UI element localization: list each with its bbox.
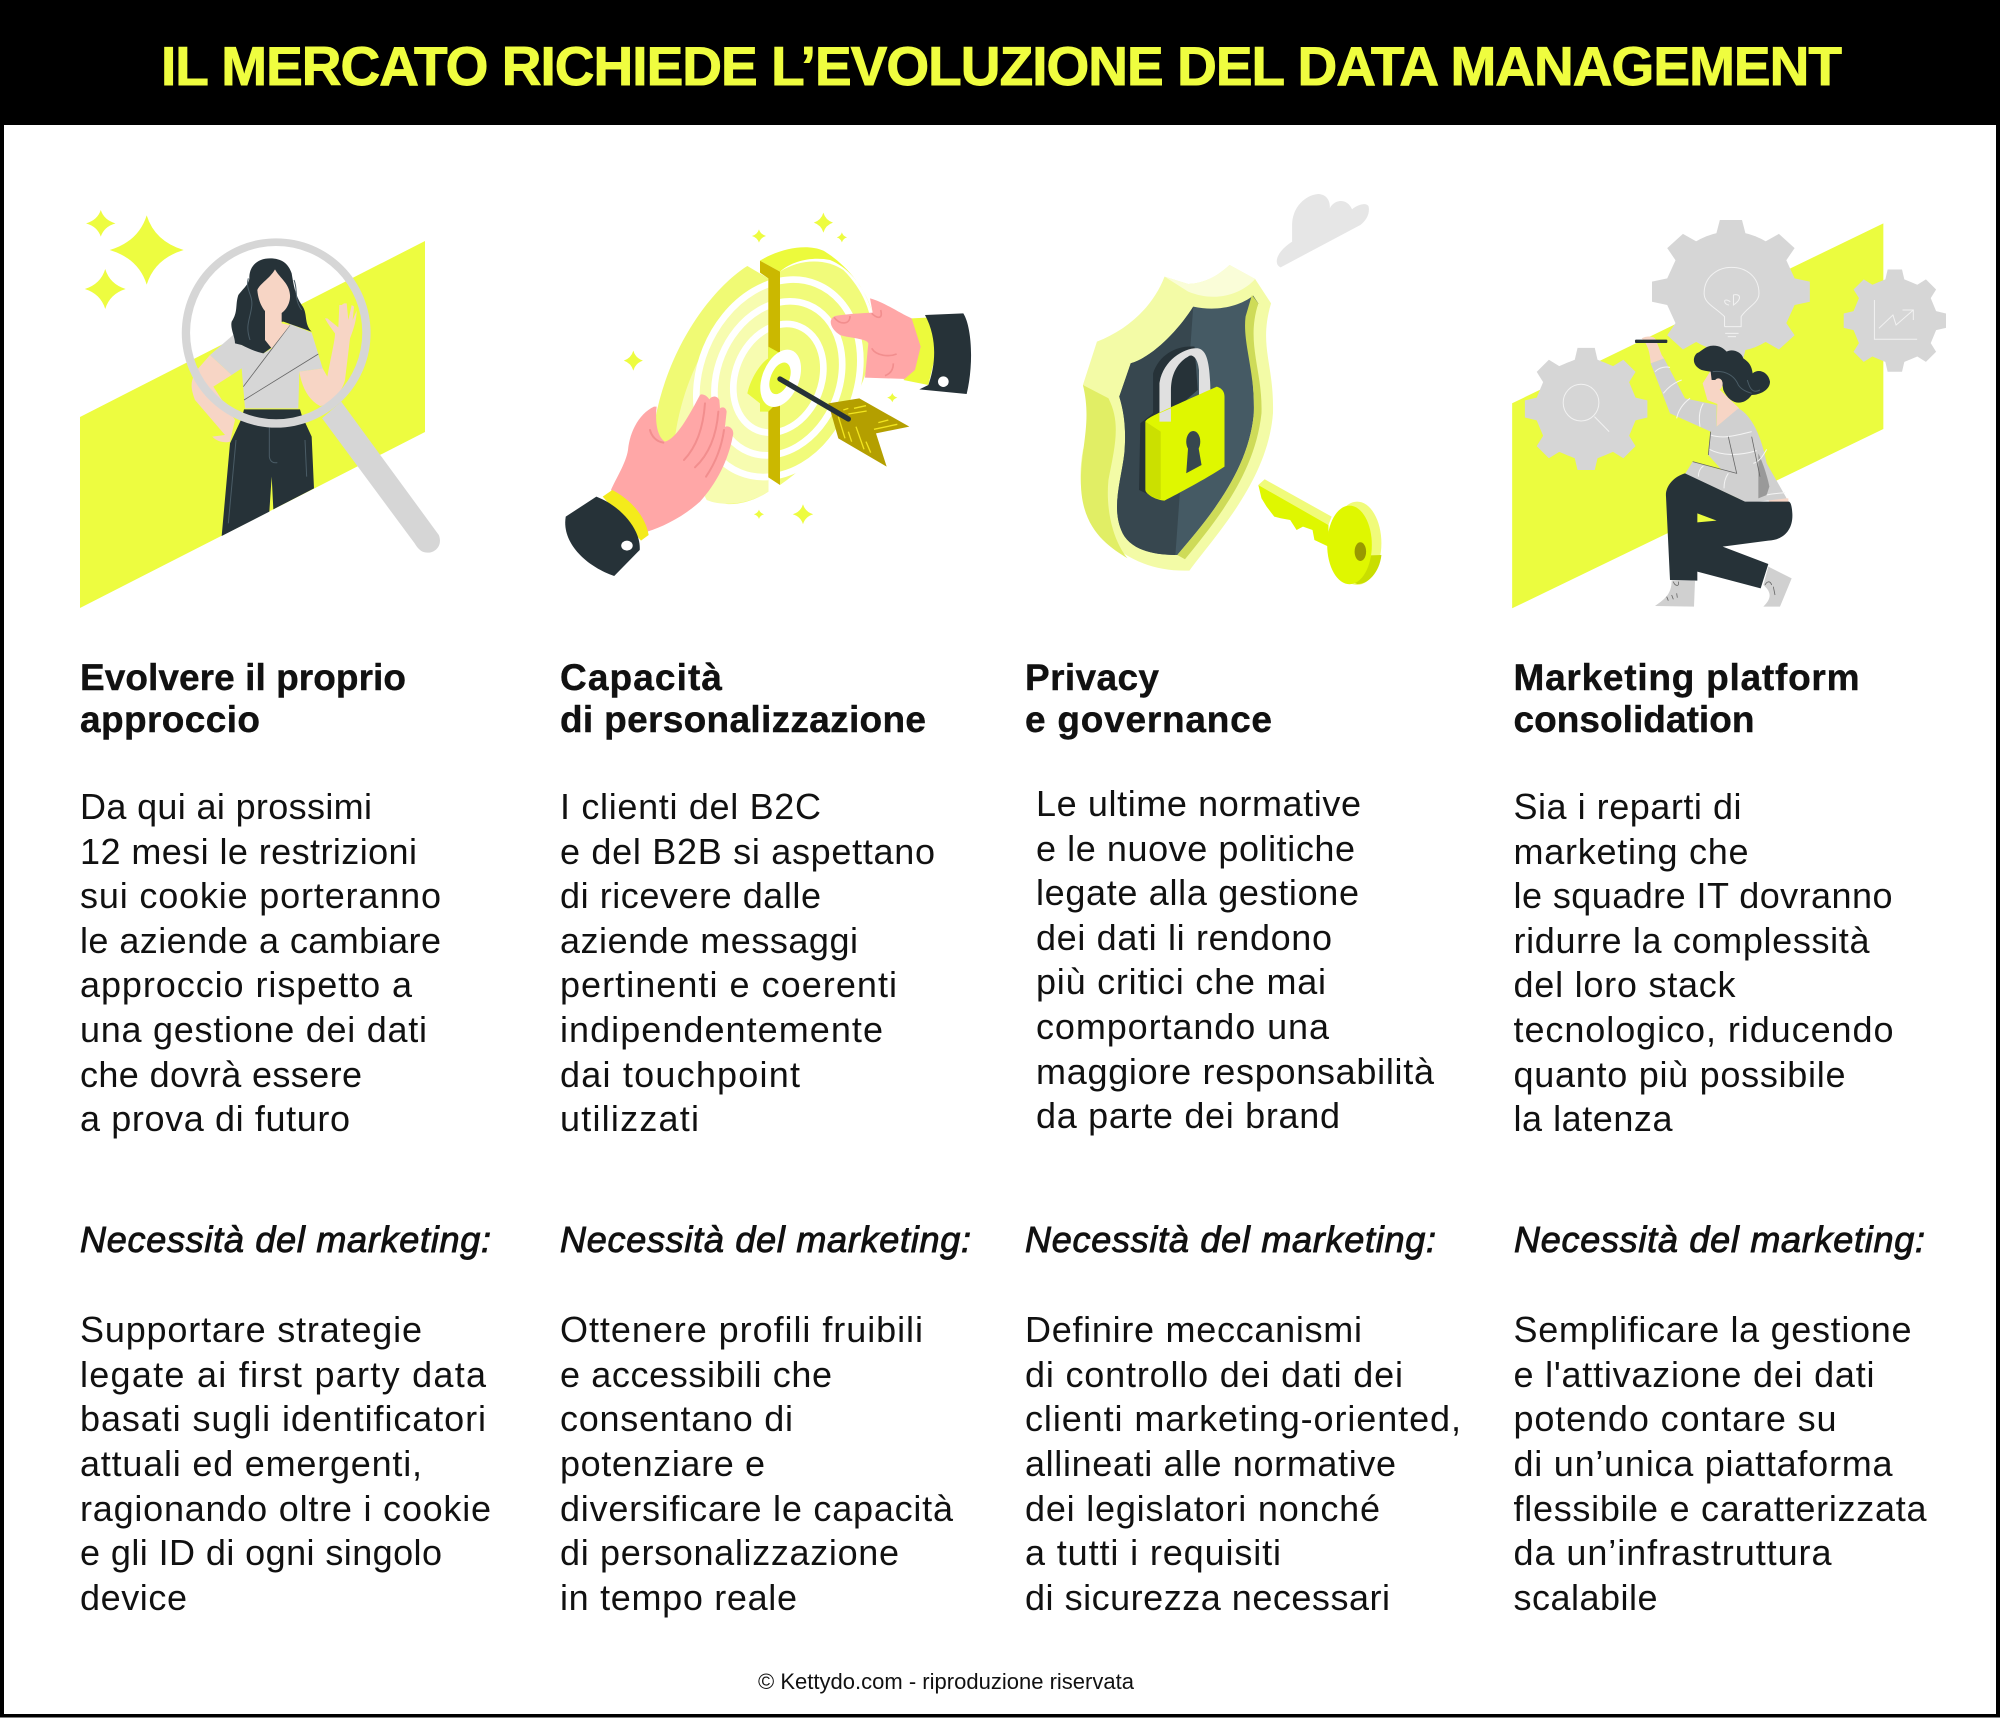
icon: growth chart: [1874, 300, 1917, 339]
body text: tecnologico, riducendo: [1514, 1009, 1894, 1050]
heading: Privacy: [1025, 657, 1159, 698]
body text: aziende messaggi: [560, 920, 858, 961]
heading: [80, 657, 406, 740]
key: [1258, 479, 1381, 585]
illustration: shield, padlock and key: [1081, 194, 1381, 585]
right hand: [831, 298, 971, 394]
body text: le squadre IT dovranno: [1514, 875, 1892, 916]
column 2 text: [560, 657, 971, 1618]
body text: Le ultime normative: [1036, 783, 1361, 824]
heading: approccio: [80, 699, 260, 740]
heading: di personalizzazione: [560, 699, 926, 740]
marketing need text: flessibile e caratterizzata: [1514, 1488, 1927, 1529]
icon: light bulb: [1704, 267, 1759, 337]
icon: magnifier: [1563, 384, 1609, 432]
body text: dei dati li rendono: [1036, 917, 1332, 958]
shirt cuff: [603, 490, 649, 541]
marketing need text: potenziare e: [560, 1443, 765, 1484]
body text: legate alla gestione: [1036, 872, 1359, 913]
body text: pertinenti e coerenti: [560, 964, 897, 1005]
marketing need text: basati sugli identificatori: [80, 1398, 486, 1439]
body text: indipendentemente: [560, 1009, 883, 1050]
marketing need text: da un’infrastruttura: [1514, 1532, 1832, 1573]
bullseye: [747, 344, 809, 413]
woman figure: [192, 258, 357, 536]
marketing need text: di personalizzazione: [560, 1532, 899, 1573]
column 4 text: [1514, 657, 1927, 1618]
marketing need text: ragionando oltre i cookie: [80, 1488, 491, 1529]
marketing need text: di sicurezza necessari: [1025, 1577, 1390, 1618]
body text: quanto più possibile: [1514, 1054, 1846, 1095]
body text: che dovrà essere: [80, 1054, 362, 1095]
marketing need text: e l'attivazione dei dati: [1514, 1354, 1874, 1395]
body text: più critici che mai: [1036, 961, 1326, 1002]
column 3 text: [1025, 657, 1461, 1618]
marketing need text: [1514, 1309, 1927, 1618]
gears: [1525, 220, 1946, 470]
column 1 text: [80, 657, 491, 1618]
subheading: Necessità del marketing:: [80, 1219, 491, 1260]
heading: [1514, 657, 1860, 740]
body text: una gestione dei dati: [80, 1009, 427, 1050]
illustration: target with hands and arrow: [565, 213, 971, 576]
illustration: person with gears: [1512, 220, 1946, 608]
target left half: [656, 266, 768, 504]
body text: di ricevere dalle: [560, 875, 821, 916]
marketing need text: Ottenere profili fruibili: [560, 1309, 923, 1350]
body text: comportando una: [1036, 1006, 1330, 1047]
heading: e governance: [1025, 699, 1272, 740]
title: IL MERCATO RICHIEDE L’EVOLUZIONE DEL DATA MANAGEMENT: [161, 35, 1842, 97]
marketing need text: di un’unica piattaforma: [1514, 1443, 1893, 1484]
target slit: [760, 261, 780, 485]
icon: sparkles: [624, 213, 897, 524]
marketing need text: [1025, 1309, 1461, 1618]
sleeve: [565, 497, 640, 576]
heading: [560, 657, 926, 740]
marketing need text: diversificare le capacità: [560, 1488, 954, 1529]
icon: sparkles: [85, 210, 184, 309]
body text: I clienti del B2C: [560, 786, 821, 827]
marketing need text: consentano di: [560, 1398, 793, 1439]
footer credit: © Kettydo.com - riproduzione riservata: [758, 1669, 1135, 1694]
marketing need text: Semplificare la gestione: [1514, 1309, 1912, 1350]
body text: sui cookie porteranno: [80, 875, 441, 916]
marketing need text: di controllo dei dati dei: [1025, 1354, 1403, 1395]
marketing need text: device: [80, 1577, 187, 1618]
subheading: Necessità del marketing:: [560, 1219, 971, 1260]
title banner: [0, 0, 2000, 125]
body text: [1514, 786, 1894, 1139]
marketing need text: legate ai first party data: [80, 1354, 487, 1395]
heading: Evolvere il proprio: [80, 657, 406, 698]
marketing need text: Supportare strategie: [80, 1309, 422, 1350]
marketing need text: [80, 1309, 491, 1618]
heading: Marketing platform: [1514, 657, 1860, 698]
illustration: woman in magnifying glass: [80, 210, 440, 608]
left hand: [611, 394, 733, 532]
padlock: [1139, 346, 1225, 501]
heading: Capacità: [560, 657, 722, 698]
subheading: Necessità del marketing:: [1514, 1219, 1925, 1260]
arrow: [780, 379, 909, 467]
marketing need text: dei legislatori nonché: [1025, 1488, 1380, 1529]
body text: a prova di futuro: [80, 1098, 350, 1139]
marketing need text: [560, 1309, 954, 1618]
heading: [1025, 657, 1272, 740]
target right half: [760, 247, 872, 485]
button: [621, 541, 633, 551]
marketing need text: Definire meccanismi: [1025, 1309, 1362, 1350]
body text: e del B2B si aspettano: [560, 831, 935, 872]
body text: Sia i reparti di: [1514, 786, 1742, 827]
body text: [1036, 783, 1435, 1136]
icon: magnifying glass: [182, 238, 440, 553]
marketing need text: potendo contare su: [1514, 1398, 1836, 1439]
marketing need text: scalabile: [1514, 1577, 1658, 1618]
body text: e le nuove politiche: [1036, 828, 1355, 869]
body text: Da qui ai prossimi: [80, 786, 372, 827]
body text: maggiore responsabilità: [1036, 1051, 1435, 1092]
body text: approccio rispetto a: [80, 964, 413, 1005]
marketing need text: e gli ID di ogni singolo: [80, 1532, 442, 1573]
body text: 12 mesi le restrizioni: [80, 831, 417, 872]
body text: ridurre la complessità: [1514, 920, 1870, 961]
marketing need text: clienti marketing-oriented,: [1025, 1398, 1461, 1439]
body text: le aziende a cambiare: [80, 920, 441, 961]
cloud: [1277, 194, 1369, 267]
body text: la latenza: [1514, 1098, 1673, 1139]
body text: utilizzati: [560, 1098, 699, 1139]
heading: consolidation: [1514, 699, 1754, 740]
body text: [80, 786, 441, 1139]
marketing need text: attuali ed emergenti,: [80, 1443, 422, 1484]
person: [1635, 337, 1792, 607]
body text: da parte dei brand: [1036, 1095, 1340, 1136]
marketing need text: a tutti i requisiti: [1025, 1532, 1281, 1573]
subheading: Necessità del marketing:: [1025, 1219, 1436, 1260]
body text: [560, 786, 935, 1139]
marketing need text: e accessibili che: [560, 1354, 832, 1395]
body text: del loro stack: [1514, 964, 1736, 1005]
marketing need text: in tempo reale: [560, 1577, 797, 1618]
marketing need text: allineati alle normative: [1025, 1443, 1396, 1484]
body text: dai touchpoint: [560, 1054, 800, 1095]
body text: marketing che: [1514, 831, 1748, 872]
shield: [1081, 265, 1273, 571]
